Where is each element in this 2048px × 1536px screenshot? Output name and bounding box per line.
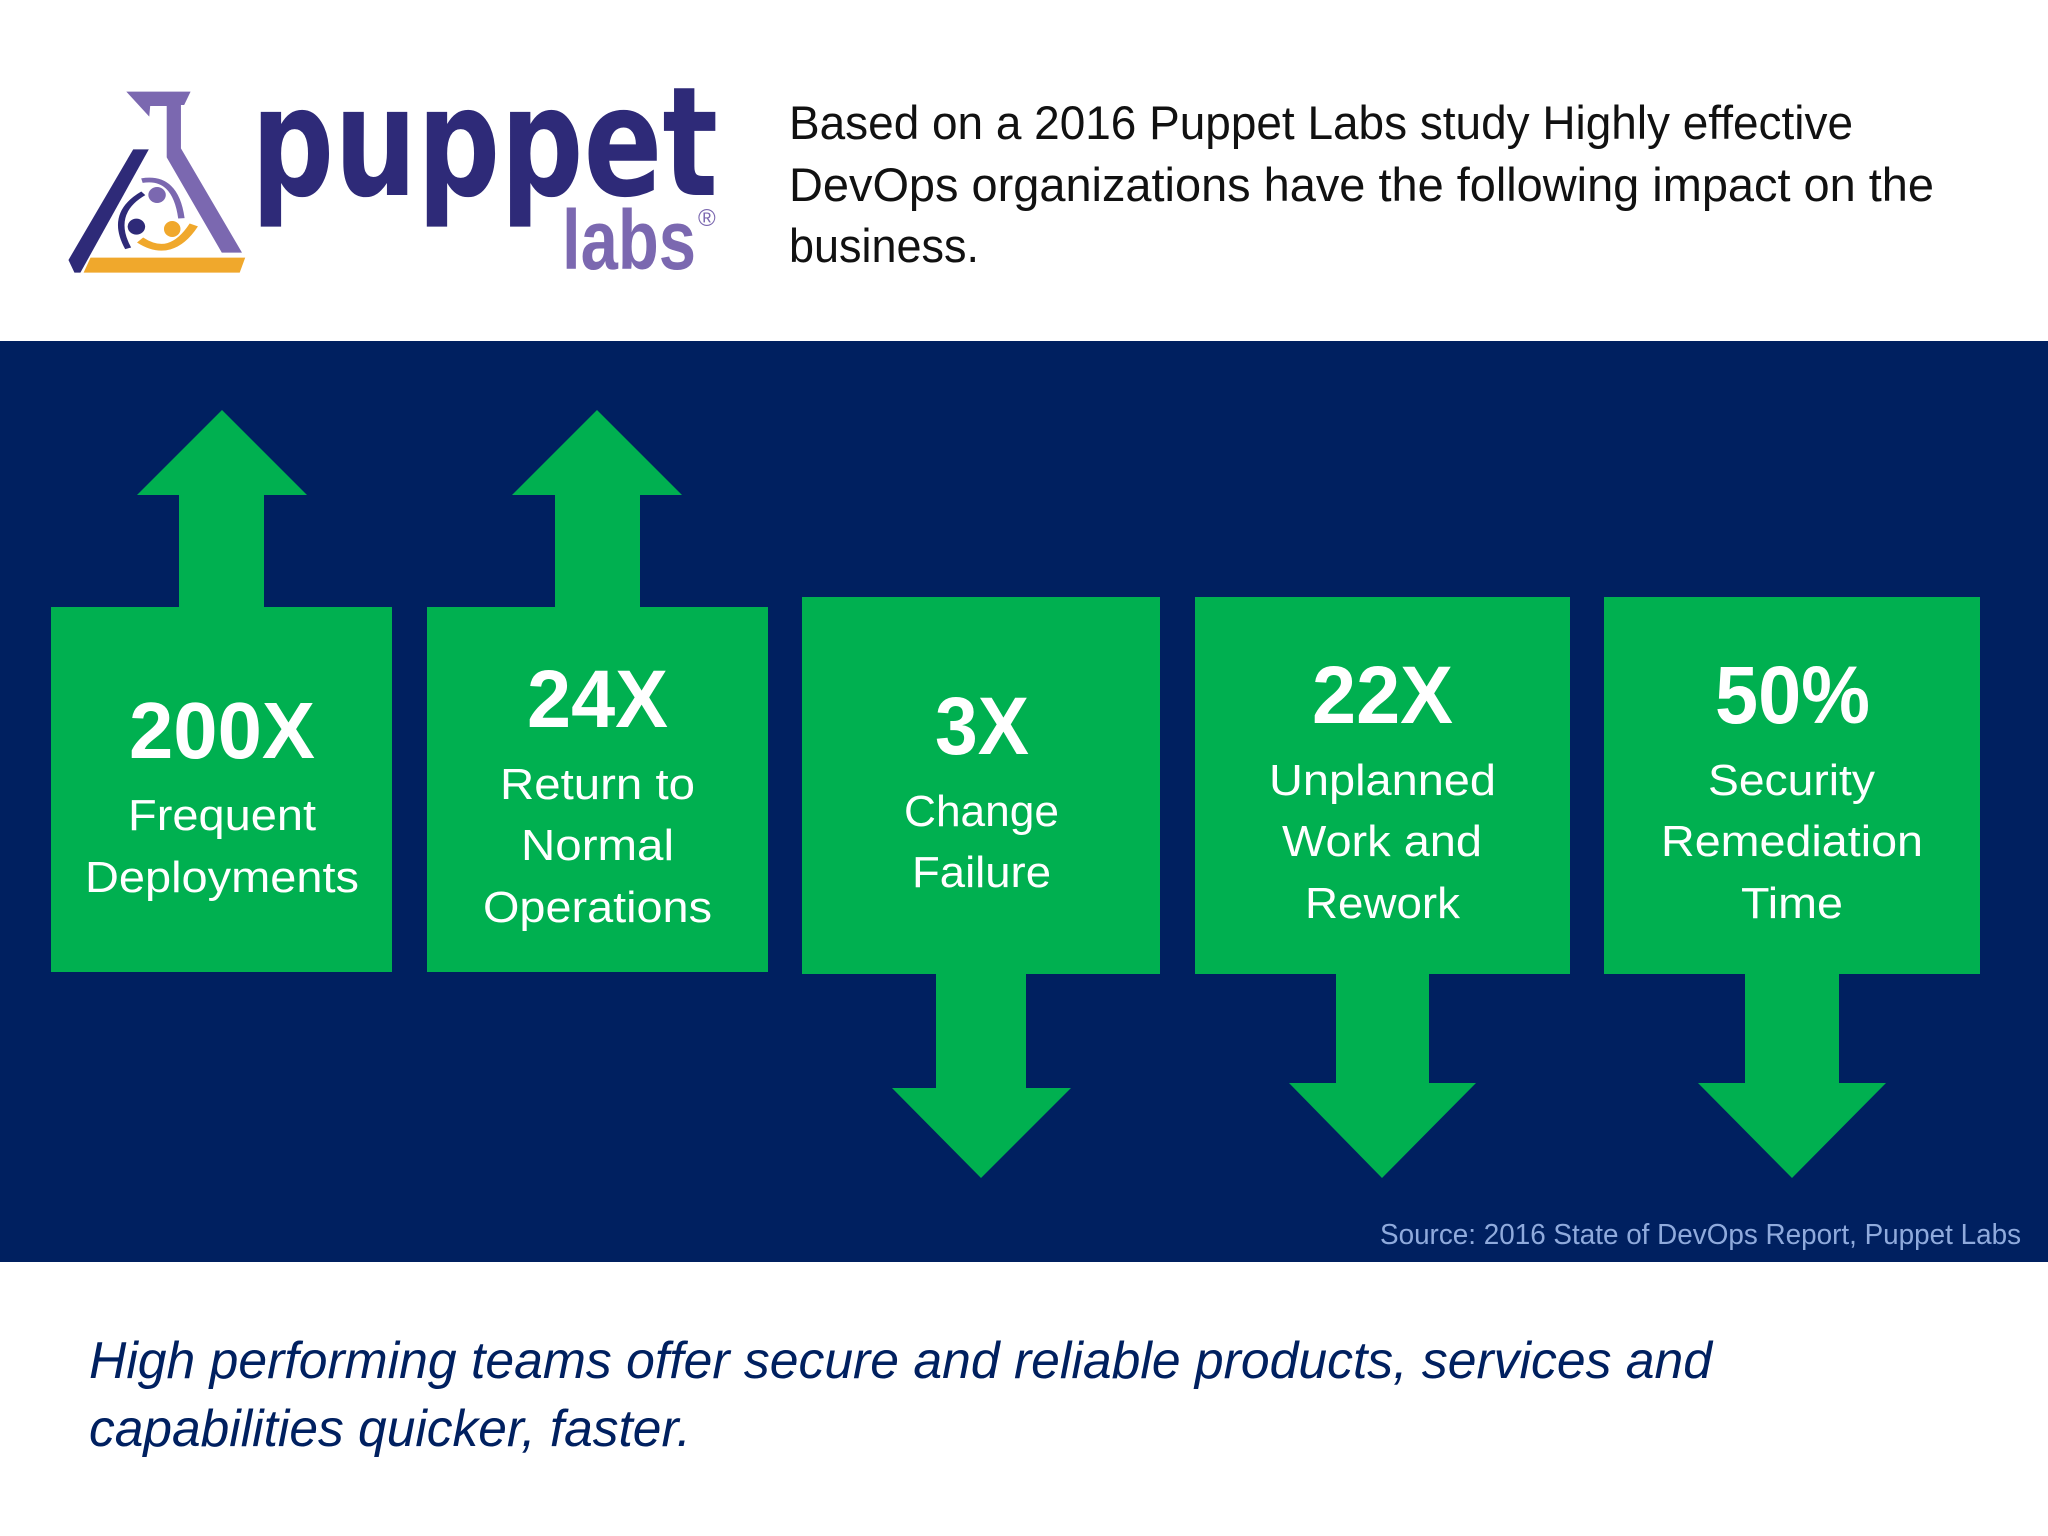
metric: 200X frequent deployments xyxy=(51,410,392,972)
metric: 22X unplanned work and rework xyxy=(1195,597,1570,1178)
metric: 22X unplanned work and rework: Work and xyxy=(1282,817,1482,866)
metric: 24X return to normal operations: Normal xyxy=(521,821,674,870)
metric: 3X change failure: Change xyxy=(904,787,1059,836)
logo: Puppet Labs xyxy=(68,54,718,287)
metric: 24X return to normal operations: Operations xyxy=(483,883,712,932)
metric: 50% security remediation time: Time xyxy=(1741,879,1843,928)
icon: flask xyxy=(68,92,245,273)
intro text: business. xyxy=(789,219,979,272)
closing statement xyxy=(89,1332,1714,1458)
closing statement: High performing teams offer secure and reliable products, services and xyxy=(89,1332,1714,1390)
intro text: Based on a 2016 Puppet Labs study Highly effective xyxy=(789,96,1853,149)
intro text xyxy=(789,96,1934,272)
metric: 50% security remediation time: 50% xyxy=(1715,650,1870,741)
metric: 3X change failure xyxy=(802,597,1160,1178)
metric: 50% security remediation time: Remediation xyxy=(1661,817,1923,866)
metric: 22X unplanned work and rework: Unplanned xyxy=(1269,756,1496,805)
metric: 24X return to normal operations: Return to xyxy=(500,760,695,809)
logo word: puppet: puppet xyxy=(251,54,718,231)
metric: 200X frequent deployments: Frequent xyxy=(128,791,316,840)
metric: 3X change failure: Failure xyxy=(912,848,1051,897)
intro text: DevOps organizations have the following impact on the xyxy=(789,158,1934,211)
metric: 200X frequent deployments: Deployments xyxy=(85,853,359,902)
metric: 24X return to normal operations: 24X xyxy=(527,654,668,745)
metric: 50% security remediation time xyxy=(1604,597,1980,1178)
metric: 50% security remediation time: Security xyxy=(1708,756,1875,805)
logo word: labs: labs xyxy=(562,193,696,287)
panel: navy metrics band xyxy=(0,341,2048,1262)
metric: 22X unplanned work and rework: Rework xyxy=(1305,879,1461,928)
logo registered mark: ® xyxy=(698,205,716,232)
metric: 200X frequent deployments: 200X xyxy=(129,686,315,775)
metric: 22X unplanned work and rework: 22X xyxy=(1312,650,1453,741)
metric: 24X return to normal operations xyxy=(427,410,768,972)
closing statement: capabilities quicker, faster. xyxy=(89,1400,691,1458)
metric: 3X change failure: 3X xyxy=(935,681,1029,772)
source note: Source: 2016 State of DevOps Report, Puppet Labs xyxy=(1380,1219,2021,1251)
